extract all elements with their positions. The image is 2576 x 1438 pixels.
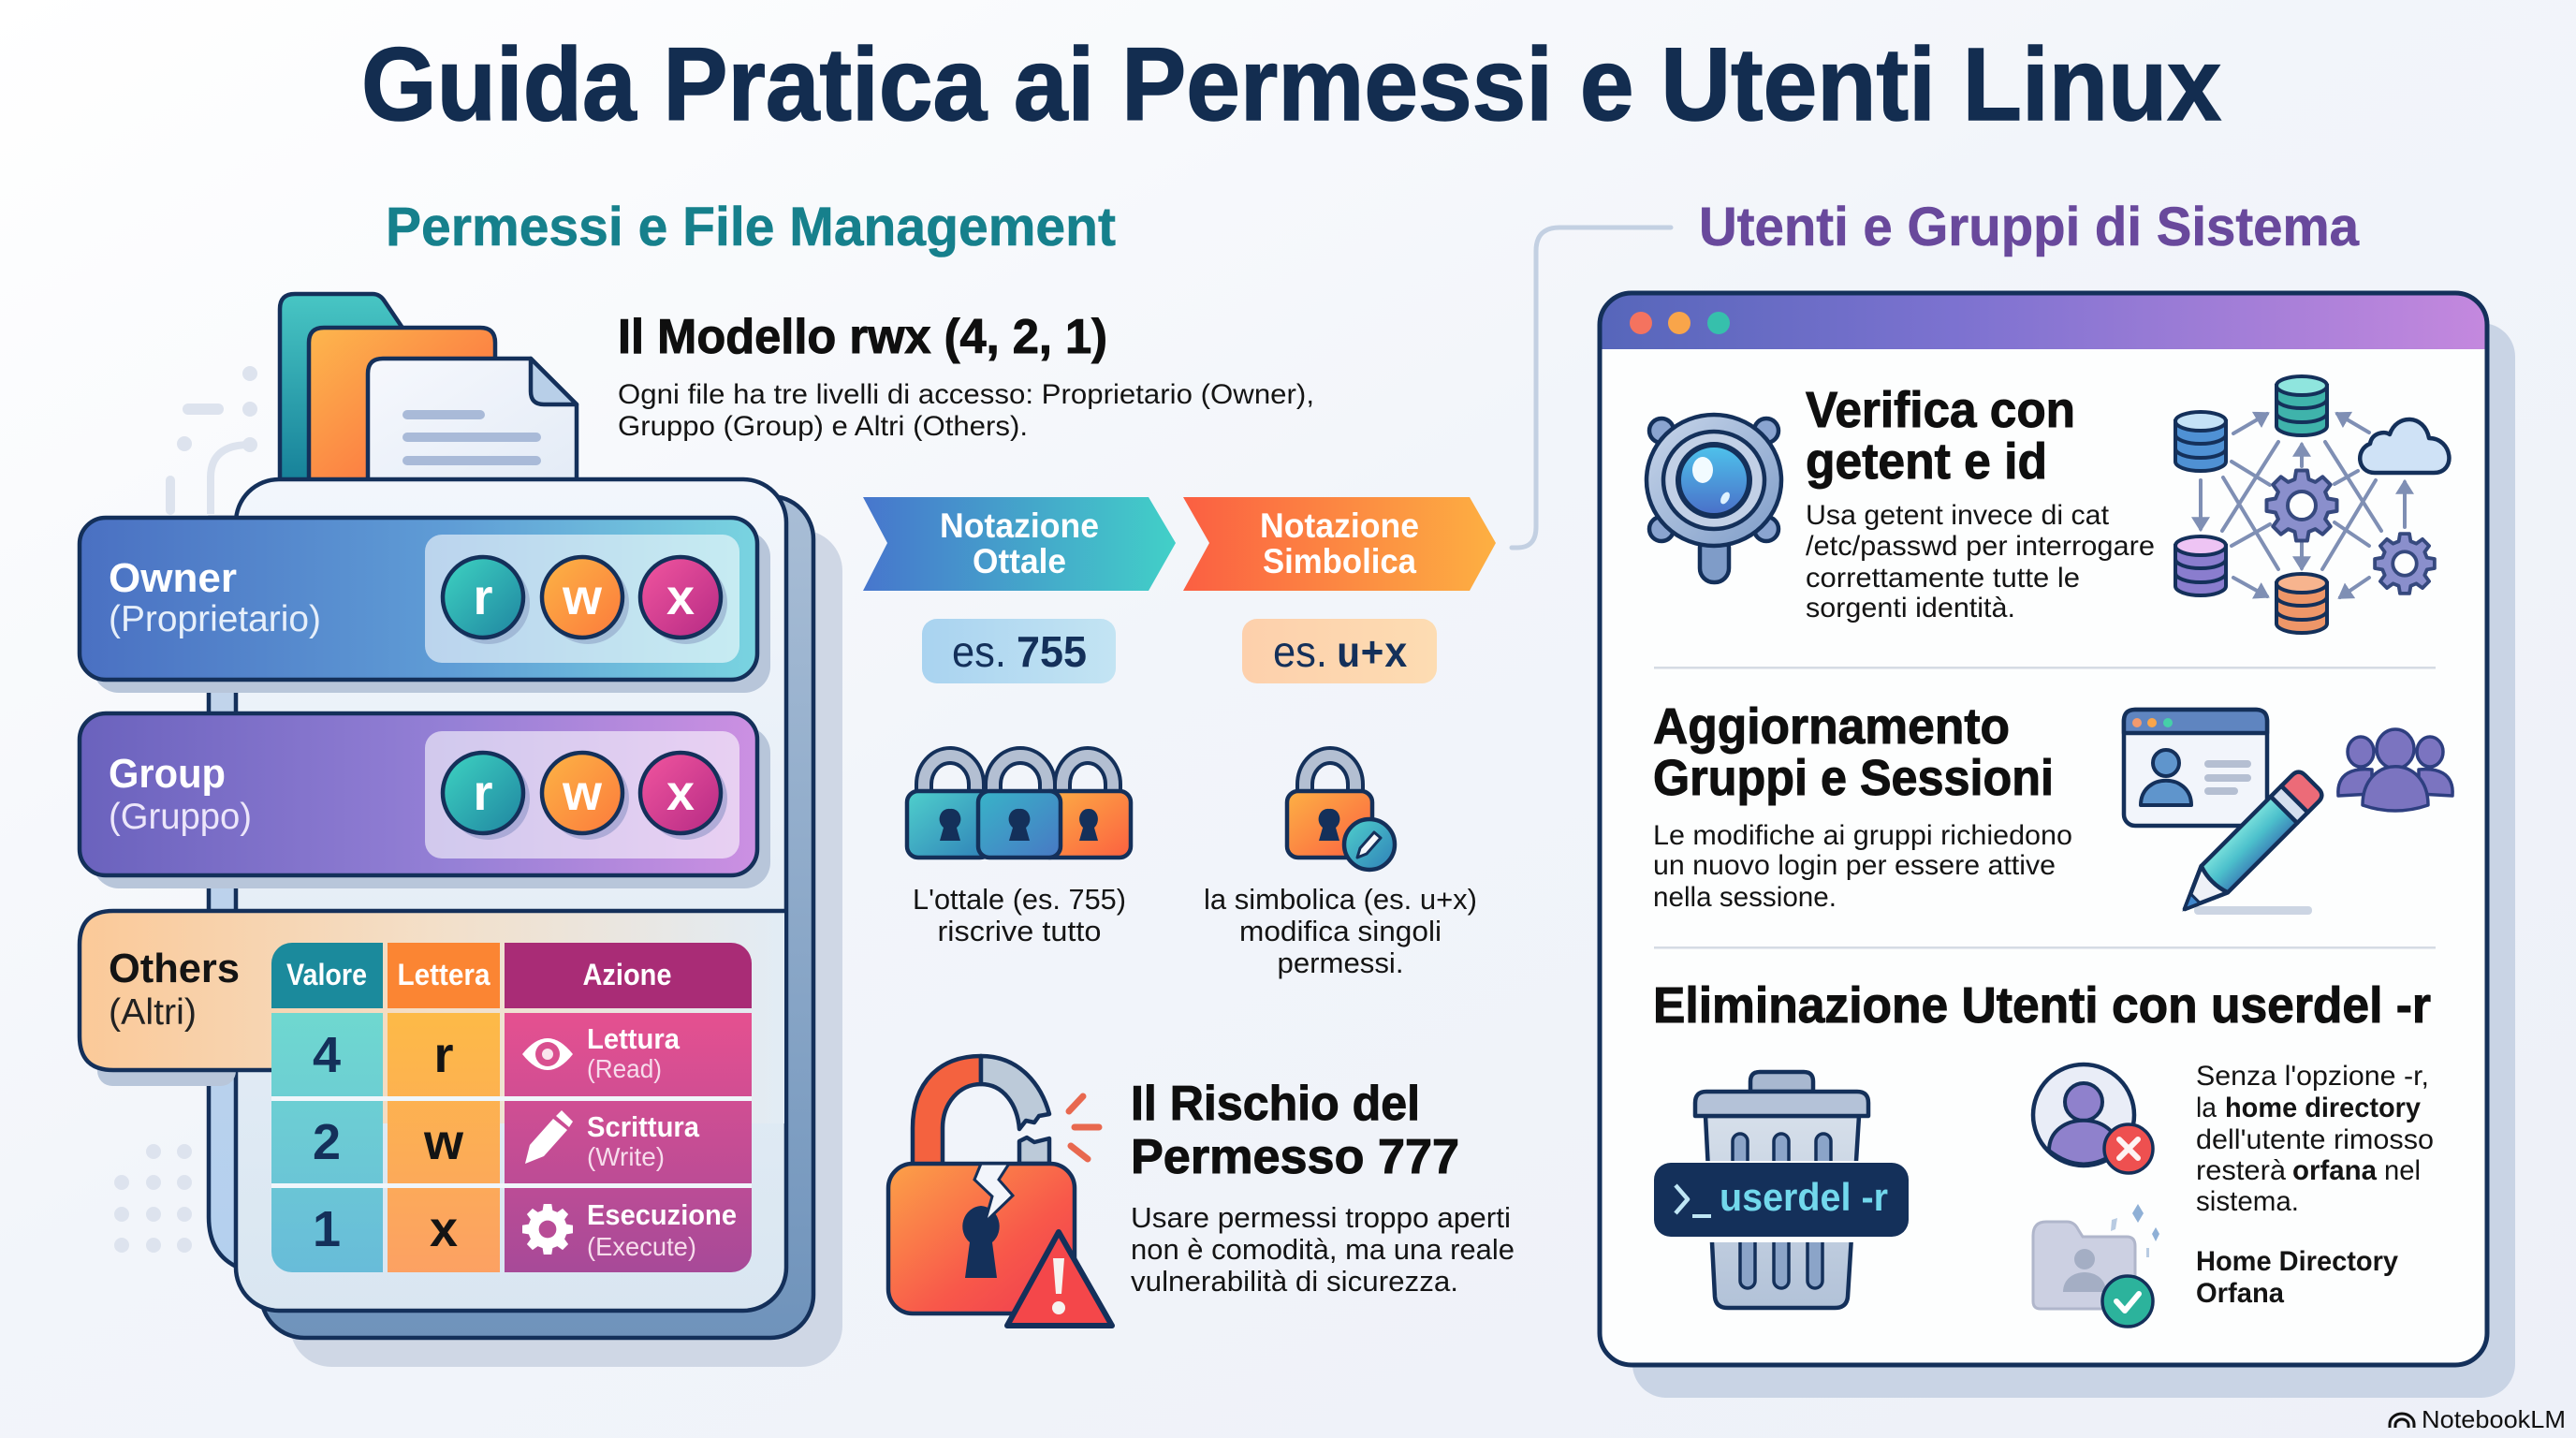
window title bar xyxy=(1600,293,2487,349)
heading: groups update: Gruppi e Sessioni xyxy=(1653,750,2054,806)
example pill: 755: es. xyxy=(952,627,1006,676)
left back strip xyxy=(209,518,281,1270)
heading: getent xyxy=(1806,382,2075,490)
section: groups update xyxy=(1653,698,2452,922)
row: execute: 1 xyxy=(313,1201,341,1257)
risk description: vulnerabilità di sicurezza. xyxy=(1131,1265,1458,1298)
owner label: Owner xyxy=(109,555,237,601)
caption: symbolic: la simbolica (es. u+x) xyxy=(1204,883,1477,916)
heading: left section: Permessi e File Management xyxy=(386,197,1116,257)
block: rwx model xyxy=(618,310,1314,442)
others label: Others xyxy=(109,946,240,991)
rwx description xyxy=(618,379,1314,442)
example pill: 755: 755 xyxy=(1017,627,1087,676)
database: purple xyxy=(2175,536,2226,595)
column: symbolic notation xyxy=(1183,497,1496,979)
heading: getent: getent e id xyxy=(1806,433,2047,490)
heading: userdel: Eliminazione Utenti con userdel -r xyxy=(1653,977,2431,1034)
caption: octal xyxy=(913,883,1126,947)
table: permission values xyxy=(267,943,758,1272)
icon: magnifier xyxy=(1647,415,1781,582)
panel: permissions stack xyxy=(80,294,842,1367)
row: write: w xyxy=(423,1114,464,1170)
icon: gear xyxy=(522,1204,573,1255)
chevron: symbolic xyxy=(1183,497,1496,591)
risk heading xyxy=(1131,1077,1459,1184)
risk description xyxy=(1131,1201,1515,1298)
label: orphan home directory xyxy=(2196,1246,2398,1309)
text: groups update description: nella sessione. xyxy=(1653,882,1837,913)
table header: Azione xyxy=(582,958,672,991)
table header: Valore xyxy=(286,958,367,991)
back panel xyxy=(261,496,813,1338)
text: orphan explanation: la xyxy=(2196,1093,2217,1123)
example pill: u+x: u+x xyxy=(1337,631,1408,680)
group permission chips xyxy=(425,731,739,858)
text: getent description: correttamente tutte le xyxy=(1806,563,2080,594)
risk heading: Il Rischio del xyxy=(1131,1077,1420,1131)
chevron: symbolic: Notazione xyxy=(1260,506,1419,545)
row: read: 4 xyxy=(313,1027,341,1083)
icon: padlock with pencil badge xyxy=(1287,756,1395,870)
row: write xyxy=(313,1110,700,1171)
chevron: octal: Notazione xyxy=(940,506,1099,545)
example pill: u+x: es. xyxy=(1273,627,1327,676)
front panel xyxy=(236,479,786,1311)
row: execute: Esecuzione xyxy=(587,1198,737,1231)
text: getent description: sorgenti identità. xyxy=(1806,593,2015,624)
icon: user group xyxy=(2338,729,2452,811)
section: getent xyxy=(1647,376,2449,633)
chevron: symbolic: Simbolica xyxy=(1263,542,1416,580)
text: getent description: Usa getent invece di cat xyxy=(1806,500,2110,531)
label: orphan home directory: Orfana xyxy=(2196,1278,2284,1309)
icon: removed user xyxy=(2033,1064,2153,1173)
caption: symbolic: modifica singoli xyxy=(1239,915,1442,947)
row: read: r xyxy=(433,1027,454,1083)
icon: broken padlock with warning xyxy=(888,1056,1112,1326)
panel: users and groups window xyxy=(1600,293,2515,1398)
heading: groups update xyxy=(1653,698,2054,806)
diagram: identity sources network xyxy=(2175,376,2449,633)
command badge xyxy=(1647,1161,1915,1242)
row: write: (Write) xyxy=(587,1142,665,1171)
text: orphan explanation: orfana xyxy=(2292,1155,2377,1186)
window card xyxy=(1600,293,2487,1365)
icon: profile window xyxy=(2124,710,2267,826)
caption: octal: L'ottale (es. 755) xyxy=(913,883,1126,916)
row: write: Scrittura xyxy=(587,1110,700,1143)
text: groups update description: Le modifiche ai gruppi richiedono xyxy=(1653,820,2072,851)
row: execute: (Execute) xyxy=(587,1232,696,1261)
window shadow xyxy=(1632,323,2515,1398)
group sublabel: (Gruppo) xyxy=(109,797,252,837)
connector line between sections xyxy=(1512,227,1671,548)
row: read: Lettura xyxy=(587,1022,681,1055)
heading: right section: Utenti e Gruppi di Sistema xyxy=(1699,197,2360,257)
group permission chips: w xyxy=(562,765,603,821)
text: orphan explanation: sistema. xyxy=(2196,1186,2299,1217)
icon: small gear xyxy=(2375,534,2435,594)
others sublabel: (Altri) xyxy=(109,992,197,1033)
caption: octal: riscrive tutto xyxy=(938,915,1101,947)
row: execute: x xyxy=(430,1201,458,1257)
icon: orphan folder xyxy=(2033,1204,2159,1327)
risk description: non è comodità, ma una reale xyxy=(1131,1233,1515,1266)
bar: group xyxy=(80,713,770,888)
owner permission chips: r xyxy=(473,569,493,625)
owner permission chips xyxy=(425,535,739,663)
heading: getent: Verifica con xyxy=(1806,382,2075,438)
icon: big gear xyxy=(2267,470,2336,541)
watermark: NotebookLM: NotebookLM xyxy=(2422,1405,2566,1433)
icon: cloud xyxy=(2360,419,2449,473)
block: risk of permission 777 xyxy=(888,1056,1515,1326)
icon: pencil xyxy=(2172,769,2325,922)
panel drop shadow xyxy=(290,530,842,1367)
icon: trash can xyxy=(1695,1072,1868,1308)
icon: eye xyxy=(522,1038,573,1070)
title: Guida Pratica ai Permessi e Utenti Linux xyxy=(361,27,2221,142)
label: orphan home directory: Home Directory xyxy=(2196,1246,2398,1277)
table header: Lettera xyxy=(397,958,490,991)
risk description: Usare permessi troppo aperti xyxy=(1131,1201,1511,1234)
row: read: (Read) xyxy=(587,1054,662,1083)
icon: folders and document xyxy=(280,294,577,487)
group label: Group xyxy=(109,751,226,797)
text: getent description: /etc/passwd per interrogare xyxy=(1806,531,2155,562)
command badge: userdel -r xyxy=(1720,1175,1888,1219)
chevron: octal: Ottale xyxy=(973,542,1066,580)
decorative circuit marks xyxy=(114,366,257,1253)
owner permission chips: x xyxy=(666,569,695,625)
bar: owner xyxy=(80,518,770,693)
database: blue xyxy=(2175,412,2226,471)
rwx description: Ogni file ha tre livelli di accesso: Proprietario (Owner), xyxy=(618,379,1314,410)
heading: groups update: Aggiornamento xyxy=(1653,698,2010,755)
text: orphan explanation: dell'utente rimosso xyxy=(2196,1124,2434,1155)
database: teal xyxy=(2276,376,2327,435)
chevron: octal xyxy=(863,497,1176,591)
text: orphan explanation: resterà xyxy=(2196,1155,2286,1186)
text: orphan explanation: Senza l'opzione -r, xyxy=(2196,1061,2429,1092)
group permission chips: x xyxy=(666,765,695,821)
icon: pencil xyxy=(525,1110,573,1164)
row: read xyxy=(313,1022,681,1083)
row: write: 2 xyxy=(313,1114,341,1170)
text: groups update description xyxy=(1653,820,2072,913)
database: orange xyxy=(2276,574,2327,633)
rwx heading: Il Modello rwx (4, 2, 1) xyxy=(618,310,1107,364)
group permission chips: r xyxy=(473,765,493,821)
row: execute xyxy=(313,1198,737,1261)
text: getent description xyxy=(1806,500,2155,624)
bar: others xyxy=(80,911,784,1123)
risk heading: Permesso 777 xyxy=(1131,1130,1459,1184)
text: orphan explanation: home directory xyxy=(2225,1093,2421,1123)
column: octal notation xyxy=(863,497,1176,947)
rwx description: Gruppo (Group) e Altri (Others). xyxy=(618,411,1028,442)
example pill: u+x xyxy=(1242,619,1437,683)
caption: symbolic: permessi. xyxy=(1277,946,1404,979)
text: groups update description: un nuovo login per essere attive xyxy=(1653,850,2056,881)
owner sublabel: (Proprietario) xyxy=(109,599,321,639)
icon: three padlocks xyxy=(907,756,1131,858)
section: userdel xyxy=(1647,977,2434,1327)
text: orphan explanation: nel xyxy=(2384,1155,2421,1186)
text: orphan explanation xyxy=(2196,1061,2434,1217)
table header xyxy=(286,958,672,991)
owner permission chips: w xyxy=(562,569,603,625)
example pill: 755 xyxy=(922,619,1116,683)
caption: symbolic xyxy=(1204,883,1477,979)
